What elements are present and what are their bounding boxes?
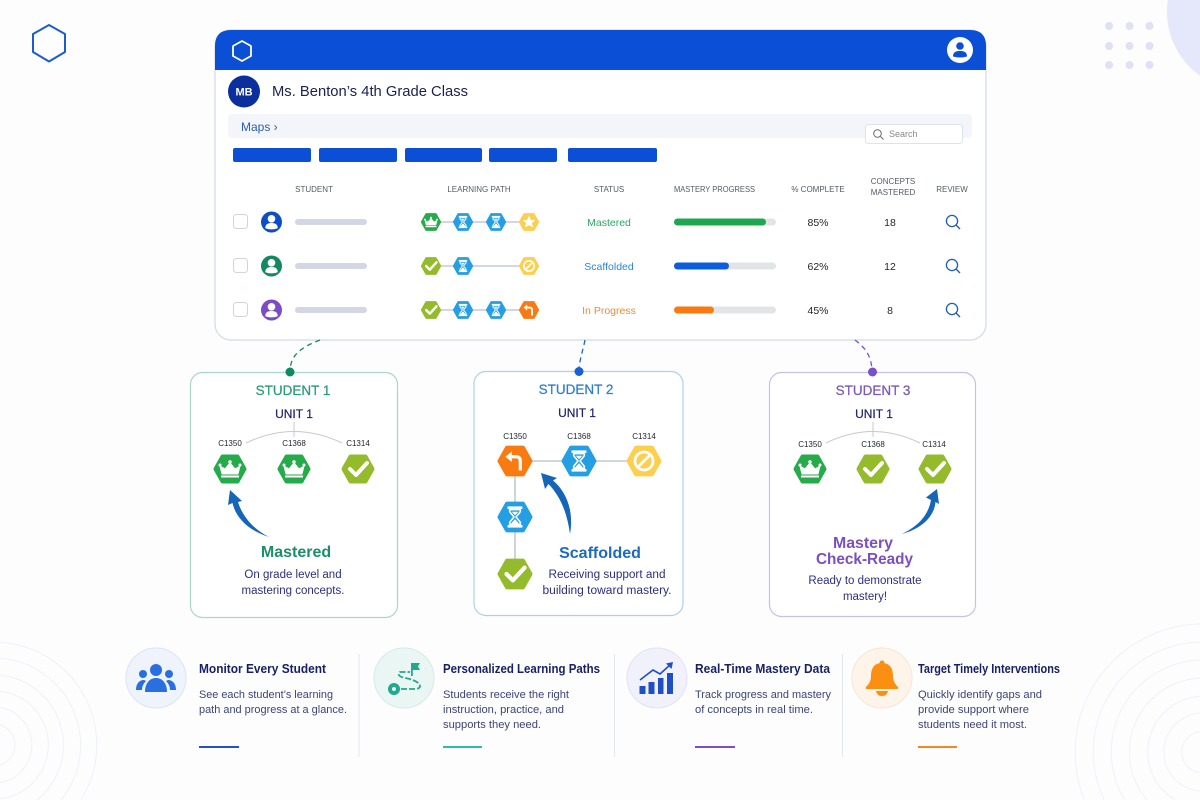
- feature: target timely interventions: students need it most.: [918, 719, 1027, 731]
- unit path: student 2: C1314: [632, 432, 656, 441]
- table row: mastered student: 18: [884, 217, 896, 229]
- table column headers: REVIEW: [936, 185, 968, 194]
- arrow: to first concept: [228, 490, 269, 537]
- panel: student 2 card: [474, 340, 683, 616]
- connector: dashboard to student 1: [286, 340, 320, 376]
- table column headers: CONCEPTS: [871, 177, 915, 186]
- search box: Search: [889, 129, 918, 139]
- status label: scaffolded: Receiving support and: [548, 569, 666, 581]
- status label: mastered: On grade level and: [244, 569, 342, 581]
- feature: target timely interventions: Target Timely Interventions: [918, 662, 1060, 676]
- status label: mastery check-ready: Ready to demonstrate: [808, 575, 922, 587]
- table row: scaffolded student: 62%: [807, 261, 829, 273]
- table column headers: % COMPLETE: [791, 185, 845, 194]
- unit tree: student 3: C1314: [922, 440, 946, 449]
- feature: real-time mastery data: [627, 648, 831, 748]
- table column headers: LEARNING PATH: [447, 185, 511, 194]
- feature: target timely interventions: provide support where: [918, 704, 1029, 716]
- heading: student 2: STUDENT 2: [539, 382, 613, 397]
- feature: target timely interventions: [852, 648, 1060, 748]
- unit tree: student 1: C1350: [218, 439, 242, 448]
- icon: alert bell: [852, 648, 912, 708]
- feature: real-time mastery data: Real-Time Mastery Data: [695, 662, 831, 676]
- heading: student 1: STUDENT 1: [256, 383, 330, 398]
- feature: real-time mastery data: of concepts in real time.: [695, 704, 813, 716]
- feature: target timely interventions: Quickly identify gaps and: [918, 689, 1042, 701]
- feature: personalized learning paths: supports they need.: [443, 719, 541, 731]
- panel: class dashboard: [215, 30, 986, 340]
- table row: scaffolded student: [234, 256, 960, 276]
- class title with MB avatar: MB: [235, 86, 253, 98]
- feature: monitor every student: Monitor Every Student: [199, 662, 327, 676]
- feature: monitor every student: [126, 648, 347, 748]
- table row: in-progress student: [234, 300, 960, 320]
- tab buttons: [233, 148, 657, 162]
- status label: scaffolded: Scaffolded: [559, 545, 641, 562]
- icon: header hexagon: [233, 41, 251, 61]
- feature: monitor every student: path and progress at a glance.: [199, 704, 347, 716]
- unit path: student 2: UNIT 1: [558, 406, 596, 420]
- search box: [866, 124, 962, 144]
- table column headers: STATUS: [594, 185, 624, 194]
- unit tree: student 3: C1350: [798, 440, 822, 449]
- class title with MB avatar: [228, 76, 468, 108]
- unit tree: student 3: [796, 407, 950, 482]
- dashboard header bar: [215, 30, 986, 70]
- status label: mastery check-ready: Check-Ready: [816, 551, 913, 568]
- unit tree: student 1: C1314: [346, 439, 370, 448]
- unit tree: student 1: C1368: [282, 439, 306, 448]
- connector: dashboard to student 2: [574, 340, 585, 376]
- table row: mastered student: [234, 212, 960, 232]
- feature: personalized learning paths: Personalized Learning Paths: [443, 662, 600, 676]
- icon: student group: [126, 648, 186, 708]
- panel: student 3 card: [770, 340, 976, 616]
- unit path: student 2: [500, 406, 659, 587]
- feature: real-time mastery data: Track progress and mastery: [695, 689, 831, 701]
- unit tree: student 3: C1368: [861, 440, 885, 449]
- status label: mastered: Mastered: [261, 544, 331, 561]
- arrow: to last concept: [902, 489, 939, 534]
- icon: user account: [947, 37, 973, 63]
- heading: student 3: STUDENT 3: [836, 383, 910, 398]
- feature: personalized learning paths: Students receive the right: [443, 689, 569, 701]
- feature: monitor every student: See each student’s learning: [199, 689, 333, 701]
- class title with MB avatar: Ms. Benton’s 4th Grade Class: [272, 84, 468, 100]
- unit tree: student 3: UNIT 1: [855, 407, 893, 421]
- table column headers: [295, 177, 968, 197]
- icon: winding path with flag: [374, 648, 434, 708]
- table row: in-progress student: In Progress: [582, 305, 636, 317]
- table column headers: STUDENT: [295, 185, 333, 194]
- feature: personalized learning paths: instruction, practice, and: [443, 704, 564, 716]
- table row: mastered student: 85%: [807, 217, 829, 229]
- icon: brand hexagon logo: [33, 25, 65, 62]
- panel: student 1 card: [190, 340, 398, 618]
- status label: mastery check-ready: mastery!: [843, 591, 887, 603]
- icon: rising bar chart: [627, 648, 687, 708]
- status label: scaffolded: [542, 545, 672, 597]
- arrow: to scaffold step: [541, 473, 571, 534]
- table column headers: MASTERED: [871, 188, 915, 197]
- unit tree: student 1: [216, 407, 372, 482]
- table row: scaffolded student: Scaffolded: [584, 261, 634, 273]
- breadcrumb bar: Maps ›: [241, 120, 278, 134]
- table row: mastered student: Mastered: [587, 217, 631, 229]
- status label: mastered: [242, 544, 344, 597]
- connector: dashboard to student 3: [855, 340, 877, 376]
- unit tree: student 1: UNIT 1: [275, 407, 313, 421]
- table row: scaffolded student: 12: [884, 261, 896, 273]
- status label: mastery check-ready: Mastery: [833, 535, 893, 552]
- status label: mastery check-ready: [808, 535, 922, 603]
- status label: mastered: mastering concepts.: [242, 585, 344, 597]
- unit path: student 2: C1350: [503, 432, 527, 441]
- table row: in-progress student: 8: [887, 305, 893, 317]
- status label: scaffolded: building toward mastery.: [542, 585, 672, 597]
- table row: in-progress student: 45%: [807, 305, 829, 317]
- table column headers: MASTERY PROGRESS: [674, 185, 755, 194]
- unit path: student 2: C1368: [567, 432, 591, 441]
- feature: personalized learning paths: [374, 648, 600, 748]
- breadcrumb bar: [228, 114, 972, 138]
